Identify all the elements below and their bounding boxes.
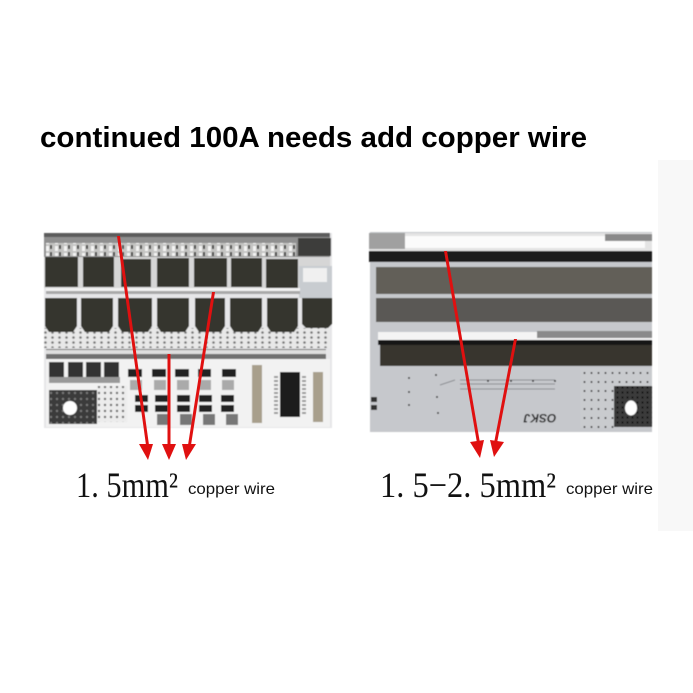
label: right copper wire: copper wire xyxy=(566,481,653,498)
label: right wire size: 1. 5−2. 5mm² xyxy=(380,465,556,505)
mounting pad with hole xyxy=(614,386,652,427)
current sense resistors xyxy=(49,362,119,377)
arrow: left board 2 xyxy=(162,354,176,460)
solder strip upper xyxy=(46,288,300,294)
right grey side strip xyxy=(658,160,693,531)
top solder foil xyxy=(369,233,652,251)
arrow: right board 2 xyxy=(490,339,517,457)
copper bands xyxy=(376,267,652,294)
label: left wire size: 1. 5mm² xyxy=(76,465,178,505)
solder strip lower xyxy=(46,349,326,359)
IC chip xyxy=(280,372,300,417)
MOSFET row 1 xyxy=(45,257,298,288)
arrow: left board 1 xyxy=(117,236,153,460)
lower foil xyxy=(378,332,652,340)
small components xyxy=(128,369,236,412)
label: left copper wire: copper wire xyxy=(188,481,275,498)
panel: right circuit board xyxy=(369,232,652,432)
pad dots xyxy=(44,328,330,348)
resistor column xyxy=(252,365,323,423)
title: continued 100A needs add copper wire xyxy=(40,122,587,154)
lower board xyxy=(46,359,330,427)
MOSFET row 2 xyxy=(45,298,332,332)
silkscreen logo: OSKJ xyxy=(523,411,556,425)
arrow: right board 1 xyxy=(444,251,484,458)
pcb trace area xyxy=(580,368,614,428)
mounting pad with hole xyxy=(49,390,97,424)
panel: left circuit board xyxy=(44,233,332,428)
arrow: left board 3 xyxy=(182,292,215,460)
